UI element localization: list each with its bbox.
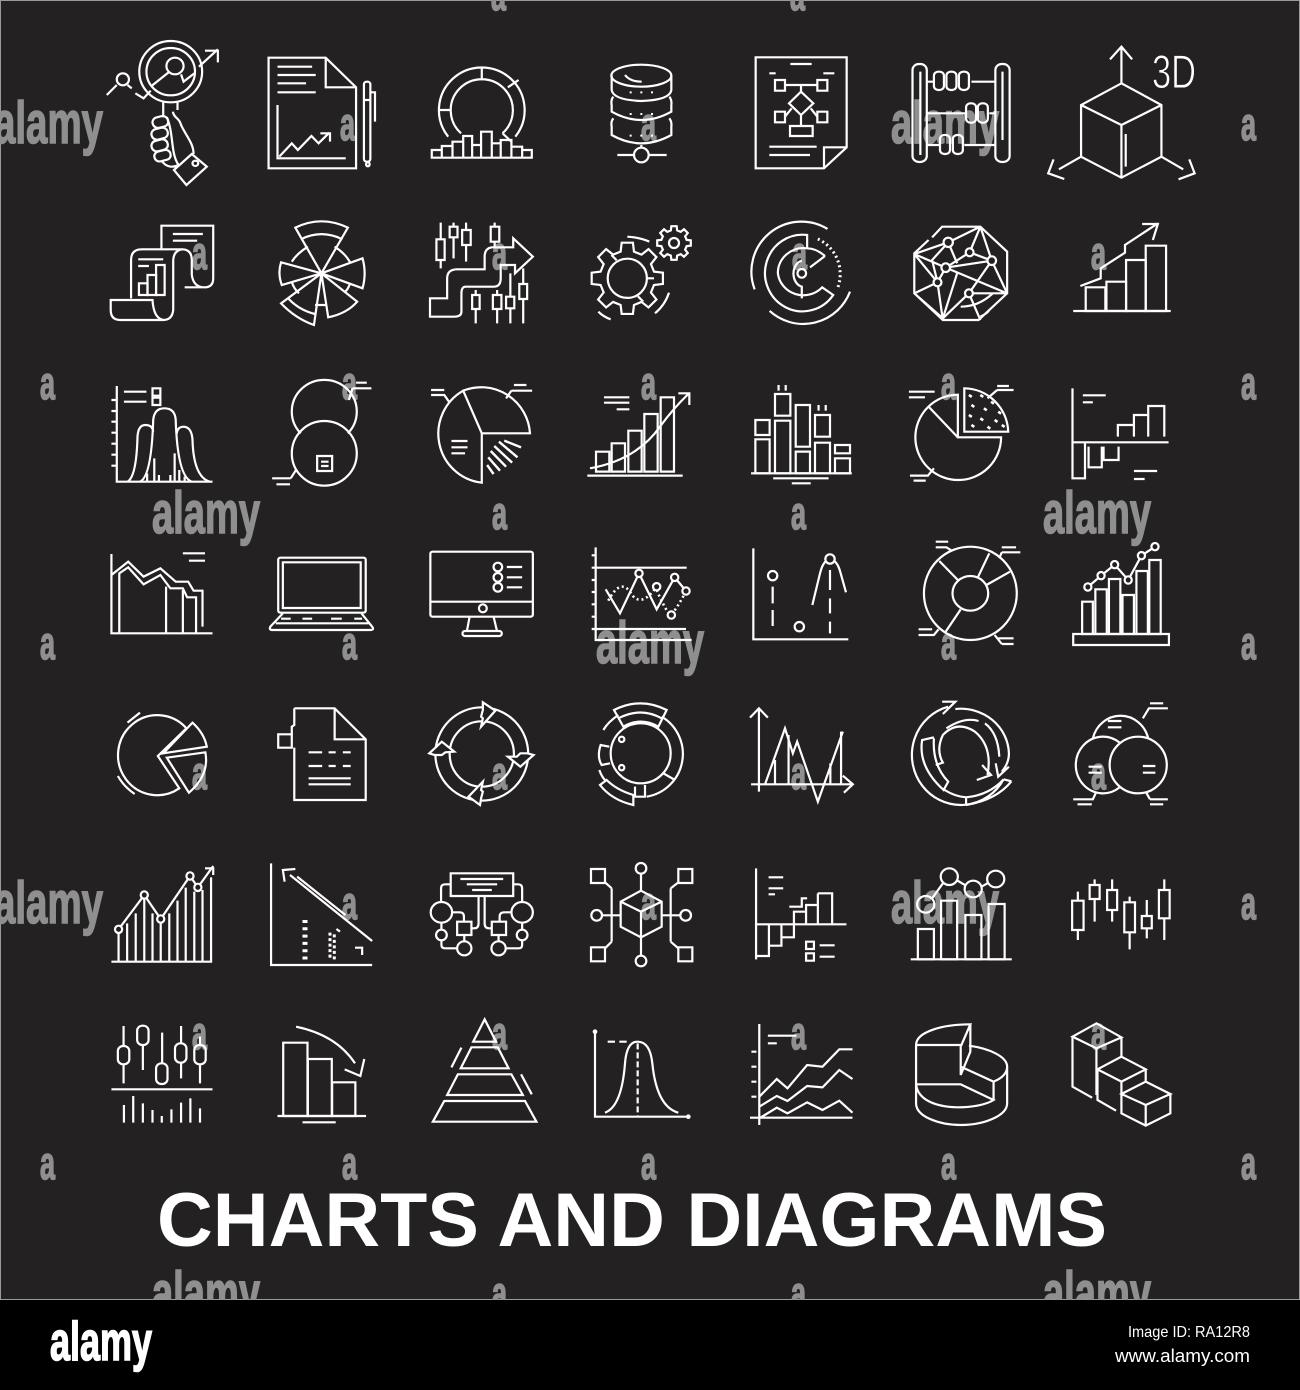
watermarks: a [40, 617, 55, 669]
icon: bars with rising curve [587, 393, 689, 476]
icon: single bell curve [593, 1029, 691, 1119]
footer bar [0, 1300, 1300, 1390]
icon: circular arrows [429, 702, 534, 805]
watermarks: alamy [891, 90, 999, 156]
icon: scroll with bar chart [111, 226, 213, 320]
watermarks: a [492, 1007, 507, 1059]
watermarks: a [192, 227, 207, 279]
icon: decreasing bars with curved arrow [277, 1027, 366, 1122]
watermarks: a [641, 1137, 656, 1189]
watermarks: a [1241, 1137, 1256, 1189]
watermarks: a [40, 1137, 55, 1189]
icon: three-circle venn [1073, 703, 1168, 804]
icon: ring above bar chart [432, 67, 532, 158]
watermarks: a [1241, 357, 1256, 409]
watermarks: a [1091, 227, 1106, 279]
icon: pie with hatched slice [431, 385, 532, 483]
watermarks: a [791, 1267, 806, 1319]
icon: abacus [912, 64, 1010, 162]
icon: descending arrow chart [271, 863, 372, 965]
watermarks: a [1091, 1007, 1106, 1059]
icon: segmented rings [599, 703, 683, 805]
watermarks: a [1091, 747, 1106, 799]
watermarks: a [492, 227, 507, 279]
icon: cube with connected nodes [591, 863, 692, 966]
watermarks: alamy [596, 610, 704, 676]
icon: segmented donut [919, 542, 1020, 644]
watermarks: a [342, 877, 357, 929]
icon: scatter with dashed lines [753, 548, 848, 639]
icon: peaks line chart [750, 708, 853, 802]
watermarks: a [941, 617, 956, 669]
icon: 3D cube with axes [1048, 45, 1196, 179]
icon: hand holding magnifier [107, 41, 218, 185]
icon: file with tab [278, 708, 366, 800]
icon: candlesticks with route arrow [430, 223, 533, 323]
icon: bell curves [111, 386, 212, 482]
icon: declining area chart [111, 553, 212, 633]
watermarks: a [641, 98, 656, 150]
watermarks: alamy [1043, 480, 1151, 546]
watermarks: a [492, 747, 507, 799]
icon: flow tree [431, 873, 533, 955]
icon: pyramid [433, 1019, 536, 1122]
watermarks: a [792, 227, 807, 279]
watermarks: a [192, 1007, 207, 1059]
watermarks: a [791, 747, 806, 799]
watermarks: alamy [891, 870, 999, 936]
icon: stepped bars with legend [756, 868, 846, 961]
watermarks: a [791, 487, 806, 539]
watermarks: a [342, 1137, 357, 1189]
watermarks: a [1241, 877, 1256, 929]
website: www.alamy.com [1114, 1346, 1250, 1366]
icon: gears [592, 226, 691, 319]
watermarks: a [342, 617, 357, 669]
icon: stacked bars [751, 385, 852, 483]
icon: pie with dotted slice [909, 386, 1014, 481]
icon: candlestick chart [1072, 879, 1170, 949]
watermarks: a [1241, 617, 1256, 669]
icon: pie with two slices out [118, 713, 207, 795]
icon: two circles diagram [272, 380, 371, 486]
icon: 3D blocks [1072, 1023, 1170, 1126]
watermarks: a [40, 357, 55, 409]
icon: mountain line with bars [111, 866, 213, 962]
watermarks: a [941, 357, 956, 409]
icon: flowchart document [756, 57, 847, 168]
icon: 3D pie [916, 1024, 1007, 1125]
image id: Image ID: RA12R8 [1128, 1324, 1250, 1341]
icon: multi-line chart [750, 1024, 852, 1125]
icon: 3D cube with axes: 3D [1152, 45, 1196, 98]
title: CHARTS AND DIAGRAMS [157, 1178, 1107, 1263]
watermarks: a [1241, 98, 1256, 150]
icon: rising step bars [1073, 223, 1171, 311]
watermarks: a [791, 1007, 806, 1059]
watermarks: a [641, 357, 656, 409]
watermarks: a [192, 747, 207, 799]
footer logo: alamy [50, 1310, 152, 1372]
icon: positive and negative bars [1072, 388, 1169, 479]
icon: laptop [270, 558, 373, 630]
icon grid [107, 41, 1196, 1126]
icon: circular arcs chart [751, 222, 850, 324]
watermarks: a [342, 357, 357, 409]
watermarks: alamy [152, 480, 260, 546]
watermarks: a [340, 98, 355, 150]
icon: bars with large dots [911, 868, 1012, 959]
icon: control line chart [592, 547, 692, 640]
icon: rounded candles with volume bars [111, 1026, 212, 1123]
icon: ring with curved arrows [912, 702, 1011, 805]
icon: radial wedge chart [279, 221, 365, 325]
icon: polygon network [914, 227, 1007, 320]
watermarks: a [492, 1267, 507, 1319]
watermarks: a [492, 487, 507, 539]
icon: database stack [611, 65, 671, 162]
icon: document with chart and pen [269, 58, 375, 168]
watermarks: a [641, 877, 656, 929]
watermarks: alamy [152, 1260, 260, 1326]
icon: desktop monitor [430, 552, 533, 636]
icon: bars with trend dots [1073, 543, 1169, 645]
watermarks: a [941, 1137, 956, 1189]
watermarks: alamy [1043, 1260, 1151, 1326]
